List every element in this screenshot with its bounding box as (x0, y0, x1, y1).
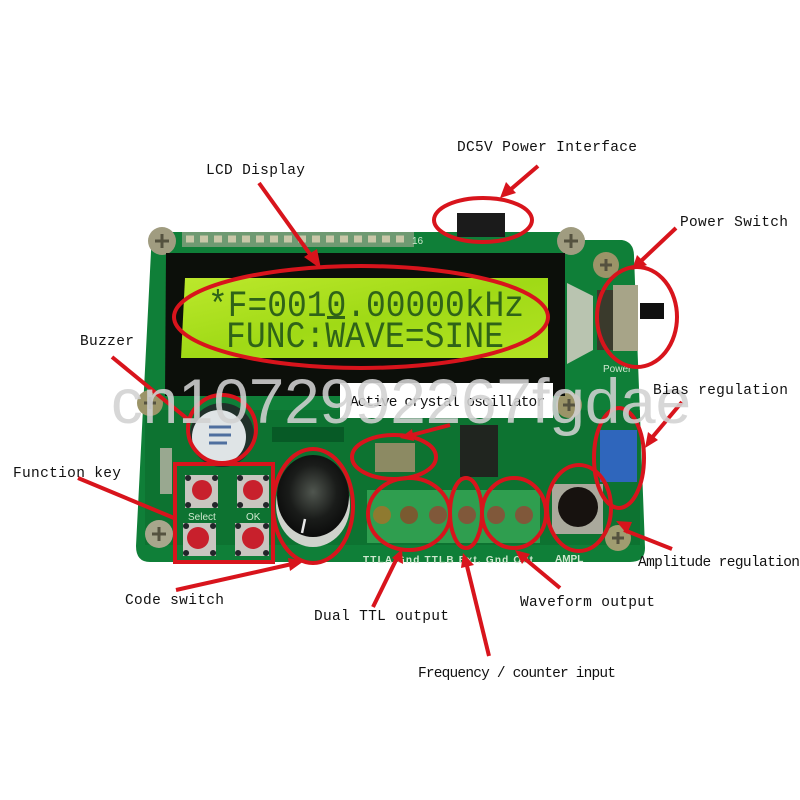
highlight: power connector (434, 198, 532, 242)
mounting screw top right (557, 227, 585, 255)
LCD cursor underline (327, 316, 345, 319)
arrow: function key (78, 478, 174, 518)
pin header (182, 232, 424, 247)
label: code switch: Code switch (125, 593, 224, 609)
button bottom left (183, 523, 216, 556)
watermark text: cn1072992267fgdae (111, 367, 691, 437)
label: frequency: Frequency / counter input (418, 666, 616, 682)
bias trimmer (600, 430, 637, 482)
highlight: crystal (352, 435, 436, 479)
label: DC5V: DC5V Power Interface (457, 140, 637, 156)
rotary knob (276, 455, 350, 547)
arrow: code switch (176, 558, 304, 590)
label: dual TTL: Dual TTL output (314, 609, 449, 625)
arrow: crystal (400, 425, 450, 441)
LCD text line 1: *F=0010.00000kHz (208, 286, 524, 328)
LCD screen (181, 278, 548, 358)
arrow: power switch (632, 228, 676, 270)
mounting screw bottom left (145, 520, 173, 548)
header pins J3 (160, 448, 172, 494)
arrow: bias (645, 402, 682, 448)
button top right (237, 475, 269, 508)
power silk label: Power (603, 364, 632, 375)
mounting screw top left (148, 227, 176, 255)
power switch (597, 285, 664, 351)
highlight: amplitude (547, 465, 611, 551)
label: waveform: Waveform output (520, 595, 655, 611)
amplitude potentiometer: AMPL (555, 554, 583, 565)
DC5V power connector (457, 213, 505, 237)
arrow: frequency input (461, 553, 489, 656)
label: buzzer: Buzzer (80, 334, 134, 350)
arrow: dual TTL (373, 549, 403, 607)
arrow: waveform (515, 550, 560, 588)
mounting screw right (593, 252, 619, 278)
mounting screw bottom right (605, 525, 631, 551)
highlight: LCD (174, 266, 548, 368)
pin header: 16 (412, 236, 424, 247)
function buttons (183, 475, 269, 556)
highlight: bias (594, 408, 644, 508)
label: bias: Bias regulation (653, 383, 788, 399)
LCD ribbon connector (567, 283, 593, 364)
amplitude potentiometer (552, 484, 603, 565)
LCD module (165, 253, 593, 396)
highlight: function keys (175, 464, 273, 562)
highlight: external input (450, 478, 482, 548)
highlight: power switch (597, 267, 677, 367)
button bottom right (235, 523, 269, 556)
terminal silk label: TTLA Gnd TTLB Ext. Gnd Out (363, 555, 534, 566)
arrow: buzzer (112, 357, 190, 421)
terminal block (363, 490, 540, 566)
arrow: LCD display (259, 183, 321, 269)
circuit board (136, 227, 645, 562)
label: power switch: Power Switch (680, 215, 788, 231)
highlight: buzzer (188, 395, 256, 463)
LCD text line 2: FUNC:WAVE=SINE (226, 317, 504, 359)
IC chip (460, 425, 498, 477)
mounting screw middle right (556, 392, 582, 418)
highlight: waveform out (482, 478, 546, 548)
button silk labels: Select (188, 512, 216, 523)
button top left (185, 475, 218, 508)
buzzer (190, 403, 254, 467)
label: amplitude: Amplitude regulation (638, 555, 800, 571)
highlight: knob (273, 449, 353, 563)
label: function key: Function key (13, 466, 121, 482)
label: crystal: Active crystal oscillator (350, 395, 545, 411)
label: LCD Display: LCD Display (206, 163, 305, 179)
button silk OK: OK (246, 512, 261, 523)
white caption strip (340, 383, 553, 418)
arrow: DC5V (500, 166, 538, 198)
arrow: amplitude (616, 521, 672, 549)
mounting screw middle left (137, 390, 163, 416)
crystal oscillator (375, 443, 415, 472)
jumper pads row (272, 427, 344, 442)
red highlight ellipses (174, 198, 677, 563)
highlight: dual TTL (368, 478, 450, 550)
